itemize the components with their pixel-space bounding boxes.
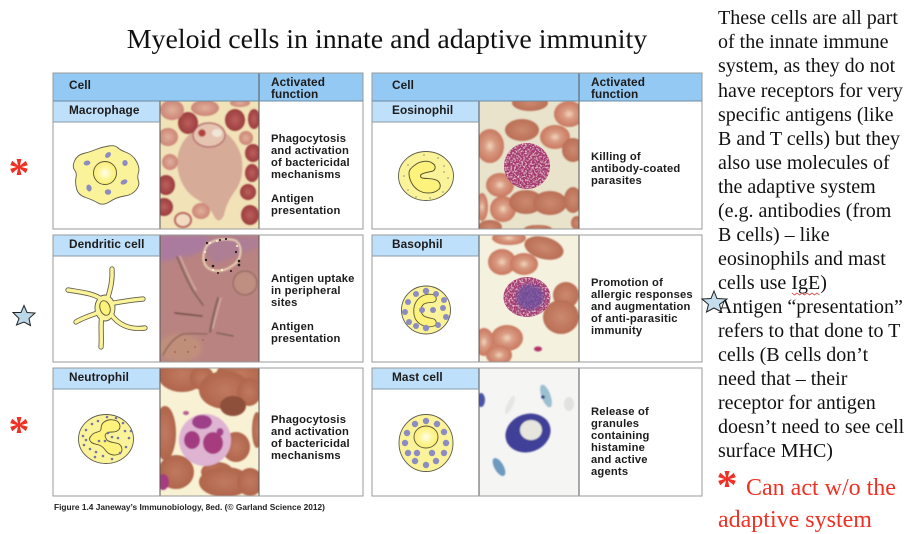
row: mast cell: granules (591, 418, 639, 430)
photo: basophil micrograph (480, 236, 578, 362)
legend: red asterisk note (716, 463, 896, 533)
text block: antigen presentation note (718, 296, 905, 462)
photo: dendritic micrograph (160, 236, 258, 362)
legend: red asterisk note: * (716, 463, 738, 509)
right header bar: Activated (591, 75, 645, 89)
row: dendritic cell: Antigen uptake (271, 273, 355, 285)
row: mast cell: histamine (591, 442, 645, 454)
row: dendritic cell: in peripheral (271, 285, 341, 297)
row: mast cell: Release of (591, 406, 649, 418)
icon: dendritic cell (68, 269, 145, 347)
row: macrophage: presentation (271, 205, 341, 217)
row: dendritic cell: Dendritic cell (69, 237, 144, 251)
right header bar: function (591, 87, 638, 101)
text block: innate immune note: B cells) – like (718, 224, 830, 246)
right header bar: Cell (392, 78, 414, 92)
row: basophil: of anti-parasitic (591, 313, 678, 325)
legend: red asterisk note: Can act w/o the (746, 475, 896, 501)
row: eosinophil: parasites (591, 175, 642, 187)
figure caption: Figure 1.4 Janeway’s Immunobiology, 8ed. (© Garland Science 2012) (54, 502, 325, 512)
text block: innate immune note: have receptors for very (718, 80, 903, 102)
right header bar (372, 73, 702, 101)
row: basophil: and augmentation (591, 301, 691, 313)
text block: antigen presentation note: receptor for antigen (718, 392, 876, 414)
panel: left table (53, 73, 363, 497)
row: dendritic cell: sites (271, 297, 298, 309)
row: macrophage: mechanisms (271, 169, 341, 181)
star: dendritic cell (13, 306, 35, 326)
row: neutrophil: Phagocytosis (271, 414, 346, 426)
row: mast cell: and active (591, 454, 648, 466)
icon: basophil (402, 286, 450, 334)
text block: antigen presentation note: need that – their (718, 368, 848, 390)
row: neutrophil: and activation (271, 426, 349, 438)
row: dendritic cell (53, 235, 363, 362)
row: mast cell (372, 368, 702, 496)
text block: innate immune note: also use molecules of (718, 152, 890, 174)
text block: innate immune note: B and T cells) but they (718, 128, 900, 150)
row: macrophage: of bactericidal (271, 157, 350, 169)
legend: red asterisk note: adaptive system (718, 507, 872, 533)
text block: antigen presentation note: doesn’t need to see cell (718, 416, 905, 438)
row: basophil (372, 231, 702, 365)
star: antigen presentation note (702, 291, 727, 312)
row: eosinophil: Eosinophil (392, 103, 453, 117)
text block: antigen presentation note: refers to that done to T (718, 320, 900, 342)
row: neutrophil: of bactericidal (271, 438, 350, 450)
row: eosinophil: antibody-coated (591, 163, 680, 175)
row: basophil: Basophil (392, 237, 443, 251)
text block: innate immune note: These cells are all part (718, 7, 898, 29)
icon: macrophage (73, 146, 139, 204)
text block: innate immune note: eosinophils and mast (718, 248, 886, 270)
row: basophil: immunity (591, 325, 643, 337)
row: mast cell: Mast cell (392, 370, 443, 384)
left header bar: function (271, 87, 318, 101)
row: neutrophil (53, 358, 363, 497)
text block: antigen presentation note: Antigen “presentation” (718, 296, 903, 318)
asterisk: macrophage: * (8, 151, 30, 197)
icon: neutrophil (78, 414, 134, 464)
icon: mast cell (399, 414, 453, 472)
photo: mast cell micrograph (480, 368, 578, 496)
spellcheck squiggle (792, 293, 820, 295)
photo: neutrophil micrograph (160, 368, 258, 496)
asterisk: neutrophil: * (8, 409, 30, 455)
panel: right table (372, 73, 702, 496)
row: eosinophil (372, 73, 702, 234)
row: macrophage: Macrophage (69, 103, 140, 117)
text block: innate immune note: of the innate immune (718, 31, 889, 53)
row: dendritic cell: presentation (271, 333, 341, 345)
row: eosinophil: Killing of (591, 151, 641, 163)
row: neutrophil: mechanisms (271, 450, 341, 462)
row: macrophage: Phagocytosis (271, 133, 346, 145)
text block: innate immune note (718, 7, 903, 294)
row: basophil: Promotion of (591, 277, 663, 289)
row: basophil: allergic responses (591, 289, 693, 301)
text block: innate immune note: specific antigens (like (718, 104, 894, 126)
row: neutrophil: Neutrophil (69, 370, 129, 384)
row: mast cell: containing (591, 430, 650, 442)
icon: eosinophil (398, 152, 454, 200)
text block: antigen presentation note: cells (B cells don’t (718, 344, 869, 366)
row: macrophage: Antigen (271, 193, 314, 205)
photo: macrophage micrograph (160, 102, 258, 228)
row: macrophage: and activation (271, 145, 349, 157)
text block: innate immune note: (e.g. antibodies (from (718, 200, 892, 222)
text block: antigen presentation note: surface MHC) (718, 440, 833, 462)
text block: innate immune note: cells use IgE) (718, 272, 827, 294)
left header bar: Activated (271, 75, 325, 89)
left header bar (53, 73, 363, 101)
left header bar: Cell (69, 78, 91, 92)
row: mast cell: agents (591, 466, 628, 478)
row: dendritic cell: Antigen (271, 321, 314, 333)
text block: innate immune note: the adaptive system (718, 176, 876, 198)
text block: innate immune note: system, as they do not (718, 55, 896, 77)
row: macrophage (53, 73, 363, 229)
title: Myeloid cells in innate and adaptive immunity (127, 24, 647, 55)
photo: eosinophil micrograph (480, 102, 578, 228)
